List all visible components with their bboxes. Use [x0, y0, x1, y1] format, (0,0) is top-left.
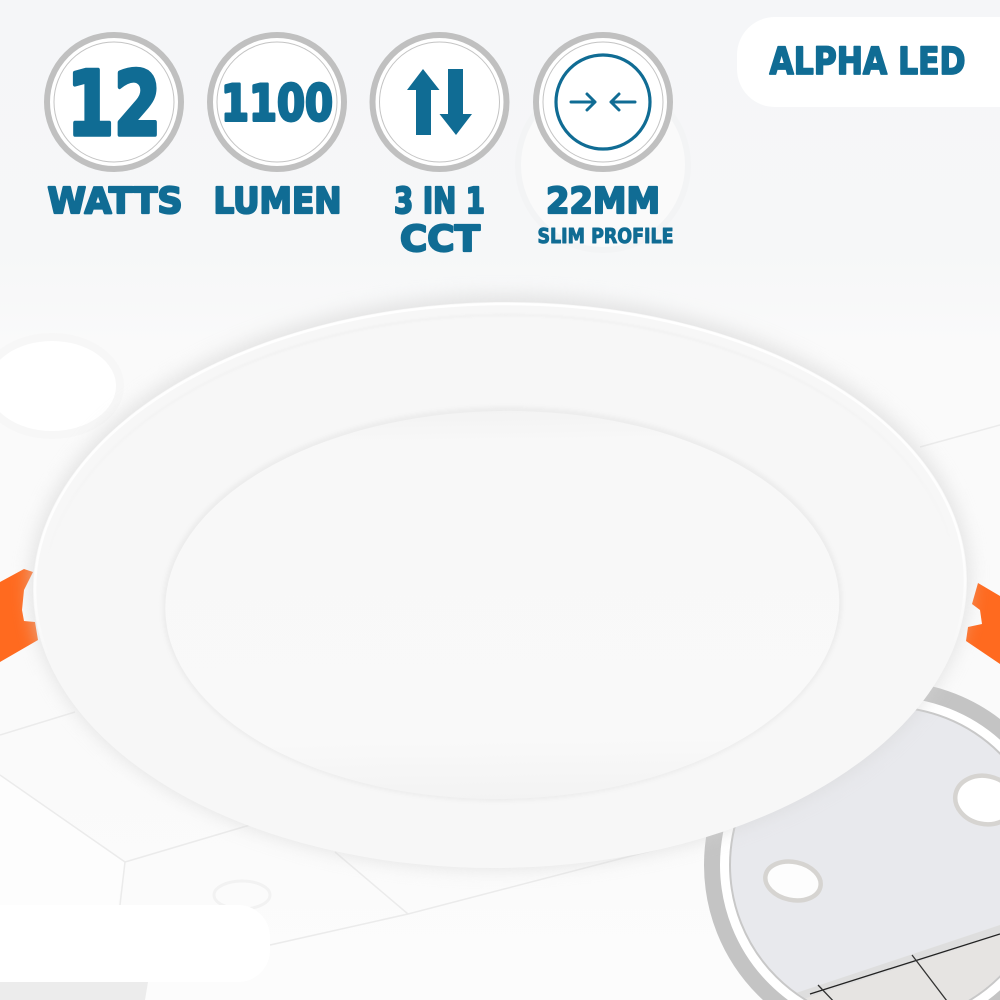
- inset surface: [790, 925, 1000, 1000]
- inner light ellipse: [163, 406, 842, 804]
- brand name: ALPHA LED: [770, 40, 966, 83]
- label slim profile: SLIM PROFILE: [538, 224, 674, 248]
- label watts: WATTS: [48, 181, 182, 222]
- blank pill bottom left: [0, 905, 270, 982]
- inset hole left: [762, 857, 824, 905]
- LED panel: [29, 296, 971, 881]
- badge: 3 in 1 CCT: [372, 35, 506, 260]
- number 12: 12: [67, 52, 161, 156]
- inset detail circle: [712, 689, 1000, 1000]
- label lumen: LUMEN: [214, 181, 342, 222]
- inner ellipse edge: [160, 402, 845, 806]
- blob behind 22mm badge: [518, 80, 688, 250]
- inset hole right: [951, 770, 1000, 830]
- badge: 12 watts: [47, 35, 182, 222]
- badge: 1100 lumen: [210, 35, 344, 222]
- right orange clip: [966, 583, 1000, 664]
- label 3 in 1: 3 IN 1: [394, 181, 485, 222]
- rim lip: [38, 309, 962, 881]
- panel shadow: [26, 288, 974, 876]
- icon: up and down arrows: [407, 69, 472, 135]
- badge: 22mm slim profile: [536, 35, 674, 248]
- white blob left: [0, 337, 120, 435]
- number 1100: 1100: [221, 74, 333, 132]
- label CCT: CCT: [400, 219, 480, 260]
- rim highlight: [31, 298, 969, 872]
- icon: slim arrows in circle: [556, 55, 650, 149]
- left orange clip: [0, 569, 38, 662]
- pill: brand: [737, 17, 1000, 107]
- label 22mm: 22MM: [546, 181, 660, 222]
